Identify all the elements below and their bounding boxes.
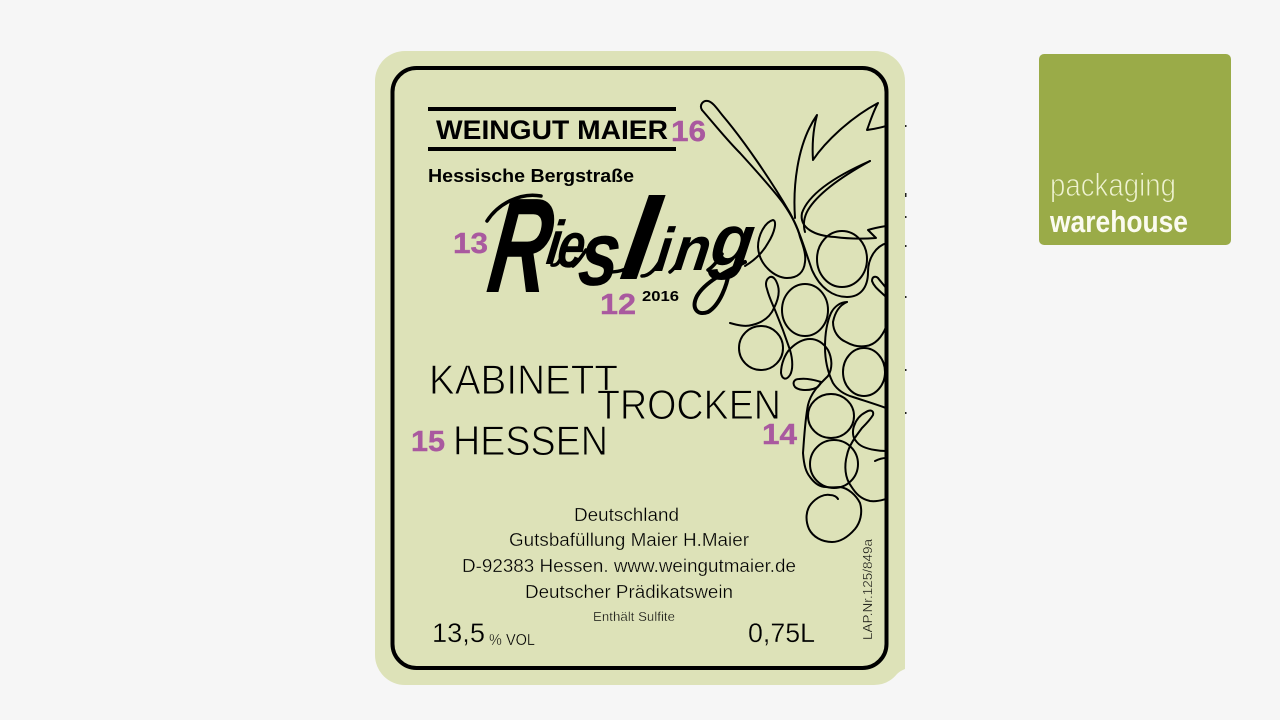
heading: winery name: [428, 107, 676, 151]
label inner border: [392, 68, 886, 668]
text: alcohol content: 13,5: [432, 618, 485, 648]
callout number 13: 13: [453, 228, 488, 260]
edge ticks: [905, 125, 906, 414]
title: grape variety: l: [614, 174, 669, 304]
text: volume: 0,75L: [748, 618, 815, 648]
title: grape variety: n: [670, 215, 716, 284]
text: Trocken: TROCKEN: [597, 381, 781, 428]
flourish: g descender: [695, 262, 745, 313]
text block: producer details: D-92383 Hessen. www.weingutmaier.de: [462, 555, 796, 576]
text block: producer details: Deutschland: [574, 504, 679, 525]
text: lot number: LAP.Nr.125/849a: [860, 538, 875, 640]
callout number 16: 16: [671, 116, 706, 148]
title: grape variety: i: [652, 216, 678, 285]
text block: producer details: [462, 504, 796, 602]
logo word: packaging: packaging: [1050, 167, 1176, 203]
panel: wine label: [375, 51, 905, 685]
text block: producer details: Gutsbafüllung Maier H.Maier: [509, 529, 749, 550]
title: grape variety: i: [543, 209, 568, 278]
text: vintage: 2016: [642, 289, 679, 305]
text: alcohol content: [432, 618, 535, 649]
title: grape variety: e: [554, 209, 591, 281]
heading: winery name: WEINGUT MAIER: [436, 115, 668, 145]
illustration: grape vine: [701, 101, 887, 542]
flourish: R top stroke and letter connectors: [487, 195, 722, 276]
logo word: warehouse: warehouse: [1049, 204, 1188, 239]
text: Kabinett: KABINETT: [429, 356, 618, 403]
title: grape variety: g: [706, 201, 760, 281]
title: grape variety: s: [573, 201, 628, 305]
panel: packaging warehouse logo: [1039, 54, 1231, 245]
text: region: Hessische Bergstraße: [428, 165, 634, 186]
text: sulfite note: Enthält Sulfite: [593, 609, 675, 624]
callout number 12: 12: [600, 289, 636, 321]
title: grape variety: R: [481, 170, 562, 321]
callout number 14: 14: [762, 419, 797, 451]
title: grape variety: [481, 170, 764, 321]
callout number 15: 15: [411, 426, 445, 458]
text: Hessen: HESSEN: [453, 417, 608, 464]
text block: producer details: Deutscher Prädikatswein: [525, 581, 733, 602]
text: alcohol content: % VOL: [489, 632, 535, 649]
